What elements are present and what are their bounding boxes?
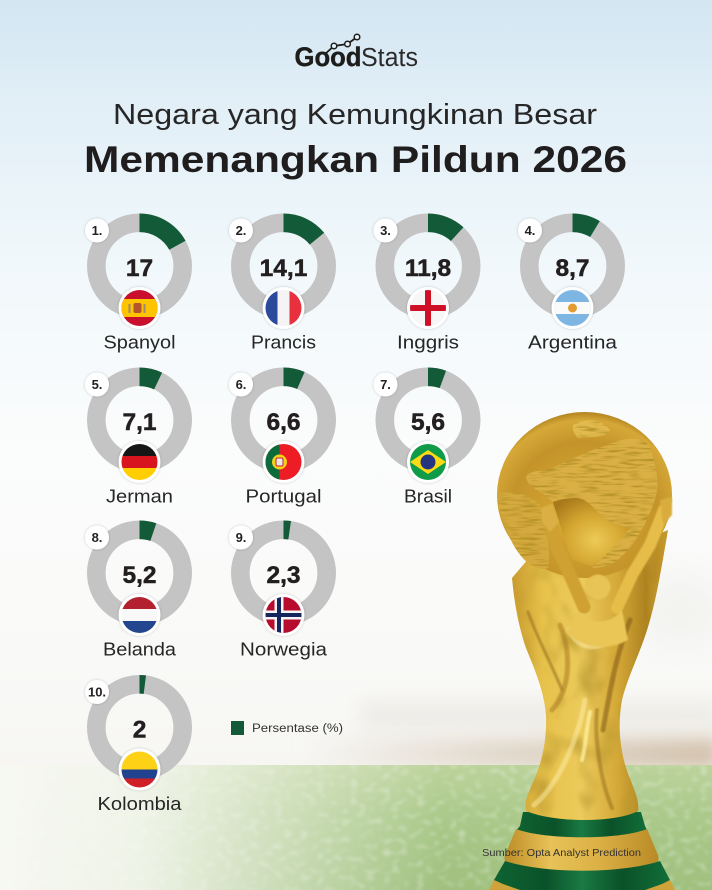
logo: GoodStats: Good	[294, 42, 362, 72]
country name: Jerman	[106, 486, 173, 506]
flag: Brazil	[407, 441, 449, 483]
trophy figure arms and head	[541, 497, 672, 647]
flag: Spain	[118, 287, 160, 329]
country name: Belanda	[103, 638, 177, 660]
title: Negara yang Kemungkinan Besar	[113, 99, 597, 131]
donut: 2 percent	[96, 684, 183, 771]
trophy illustration	[489, 412, 675, 890]
logo: GoodStats: Stats	[361, 44, 418, 72]
globe continents	[497, 420, 657, 569]
donut: 5.6 percent	[385, 377, 471, 463]
country name: Prancis	[251, 332, 316, 352]
rank badge: 3.	[380, 223, 391, 238]
value: 11,8	[405, 255, 451, 282]
value: 17	[126, 255, 153, 282]
rank badge: 5.	[92, 377, 102, 392]
flag: France	[262, 287, 304, 329]
flag: England	[407, 287, 449, 329]
panel: 8 Belanda 5,2	[85, 526, 183, 660]
country name: Spanyol	[104, 332, 176, 352]
flag: Netherlands	[118, 594, 160, 636]
country name: Norwegia	[240, 638, 328, 660]
donut: 11.8 percent	[385, 223, 471, 309]
flag: Germany	[118, 441, 160, 483]
panel: 4 Argentina 8,7	[518, 218, 618, 352]
panel: 7 Brasil 5,6	[374, 372, 471, 506]
value: 2	[133, 716, 146, 744]
rank badge: 7.	[380, 377, 391, 392]
trophy base	[489, 812, 675, 890]
rank badge: 8.	[92, 530, 102, 545]
source: Sumber: Opta Analyst Prediction	[482, 847, 641, 859]
title	[84, 99, 627, 180]
panel: 5 Jerman 7,1	[85, 372, 183, 506]
country name: Argentina	[528, 332, 618, 352]
flag: Norway	[262, 594, 304, 636]
donut: 6.6 percent	[240, 377, 327, 463]
logo: GoodStats	[294, 34, 418, 72]
panel: 10 Kolombia 2	[85, 680, 183, 814]
flag: Colombia	[118, 748, 160, 790]
value: 14,1	[260, 255, 307, 282]
trophy globe	[497, 412, 672, 578]
title: Memenangkan Pildun 2026	[84, 139, 627, 180]
value: 2,3	[266, 562, 301, 589]
panel: 6 Portugal 6,6	[229, 372, 327, 506]
donut: 7.1 percent	[96, 377, 183, 463]
rank badge: 2.	[236, 223, 246, 238]
value: 8,7	[555, 255, 590, 282]
value: 7,1	[122, 409, 157, 436]
panel: 2 Prancis 14,1	[229, 218, 327, 352]
donut: 5.2 percent	[96, 530, 183, 616]
trophy body	[512, 530, 668, 820]
flag: Portugal	[262, 441, 304, 483]
donut: 8.7 percent	[529, 223, 616, 309]
rank badge: 1.	[92, 223, 102, 238]
panel: 1 Spanyol 17	[85, 218, 183, 352]
panel: 3 Inggris 11,8	[374, 218, 471, 352]
country name: Brasil	[404, 486, 452, 506]
country name: Kolombia	[98, 793, 182, 814]
globe central patch	[553, 498, 630, 566]
legend	[231, 721, 343, 735]
value: 5,6	[411, 409, 445, 436]
legend: Persentase (%)	[252, 723, 343, 735]
rank badge: 6.	[236, 377, 246, 392]
rank badge: 4.	[525, 223, 535, 238]
trophy folds	[528, 612, 630, 808]
country name: Portugal	[246, 486, 322, 506]
value: 5,2	[122, 562, 157, 589]
panel: 9 Norwegia 2,3	[229, 526, 328, 660]
flag: Argentina	[552, 287, 594, 329]
rank badge: 9.	[236, 530, 246, 545]
country name: Inggris	[397, 332, 459, 352]
donut: 14.1 percent	[240, 223, 327, 309]
donut: 17 percent	[96, 223, 183, 309]
donut: 2.3 percent	[240, 530, 327, 616]
value: 6,6	[266, 409, 301, 436]
rank badge: 10.	[88, 684, 106, 700]
